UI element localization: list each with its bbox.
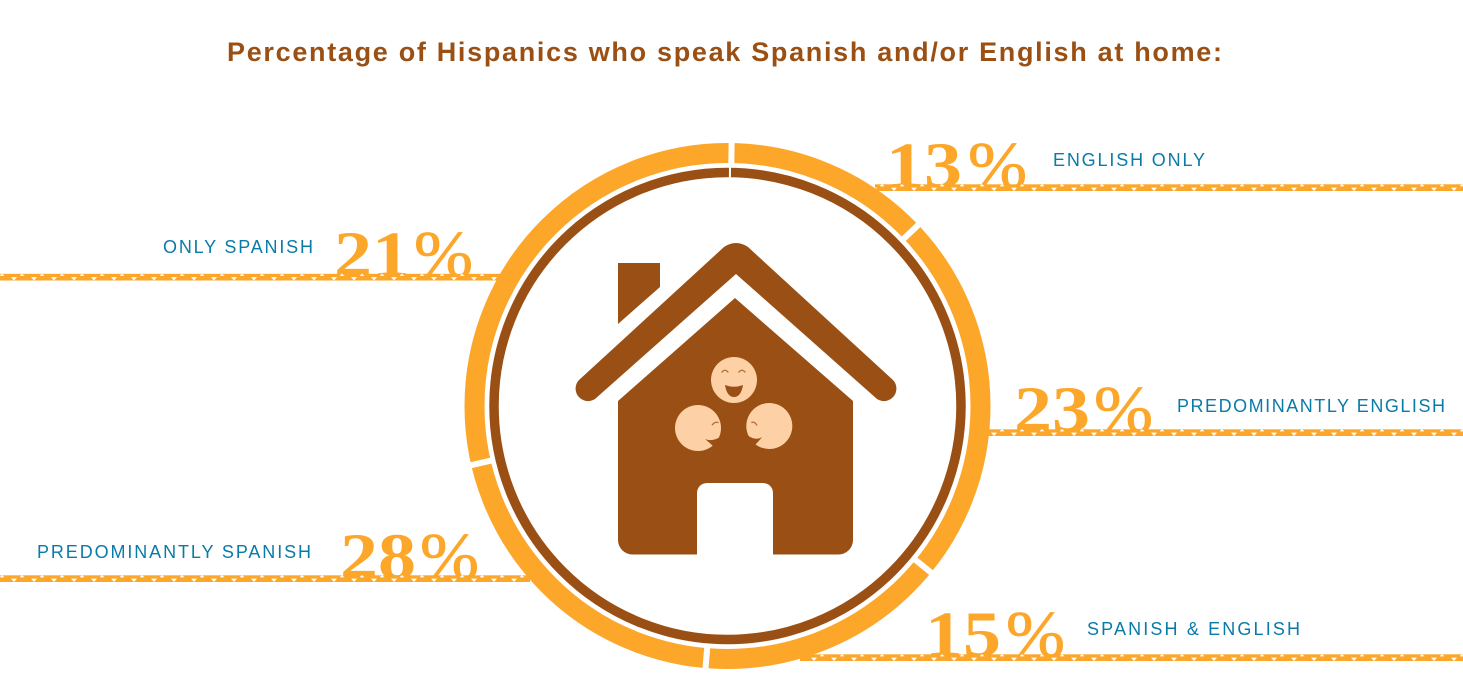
callout: 23% predominantly English: 23 [1014, 374, 1090, 446]
icon: smiling face, left [675, 405, 724, 451]
donut ring: segmented language shares [467, 139, 980, 672]
inner brown ring [494, 166, 961, 640]
icon: house body with door [618, 298, 853, 554]
callout: 15% Spanish and English: % [1006, 598, 1065, 671]
callout: 28% predominantly Spanish: PREDOMINANTLY SPANISH [37, 542, 311, 562]
icon: chimney [618, 263, 660, 324]
callout: 21% only Spanish [0, 218, 500, 291]
callout: 13% English only: % [968, 129, 1027, 202]
callout: 15% Spanish and English: 15 [925, 599, 1001, 671]
callout: 21% only Spanish: 21 [334, 219, 410, 291]
callout: 23% predominantly English [985, 373, 1463, 446]
callout: 23% predominantly English: PREDOMINANTLY ENGLISH [1177, 396, 1445, 416]
callout: 28% predominantly Spanish: 28 [340, 521, 416, 593]
icon: roof [576, 243, 896, 401]
callout: 21% only Spanish: ONLY SPANISH [163, 237, 313, 257]
callout: 13% English only: 13 [886, 130, 962, 202]
icon: smiling face, right [743, 403, 792, 449]
callout: 15% Spanish and English: SPANISH & ENGLISH [1087, 619, 1300, 639]
callout: 28% predominantly Spanish [0, 520, 530, 593]
callout: 13% English only [875, 129, 1463, 202]
callout: 23% predominantly English: % [1094, 373, 1153, 446]
callout: 21% only Spanish: % [414, 218, 473, 291]
callout: 15% Spanish and English [800, 598, 1463, 671]
icon: house with family [576, 243, 896, 554]
icon: smiling face, top [711, 357, 757, 403]
title: Percentage of Hispanics who speak Spanish and/or English at home: [227, 37, 1222, 67]
callout: 13% English only: ENGLISH ONLY [1053, 150, 1205, 170]
callout: 28% predominantly Spanish: % [420, 520, 479, 593]
